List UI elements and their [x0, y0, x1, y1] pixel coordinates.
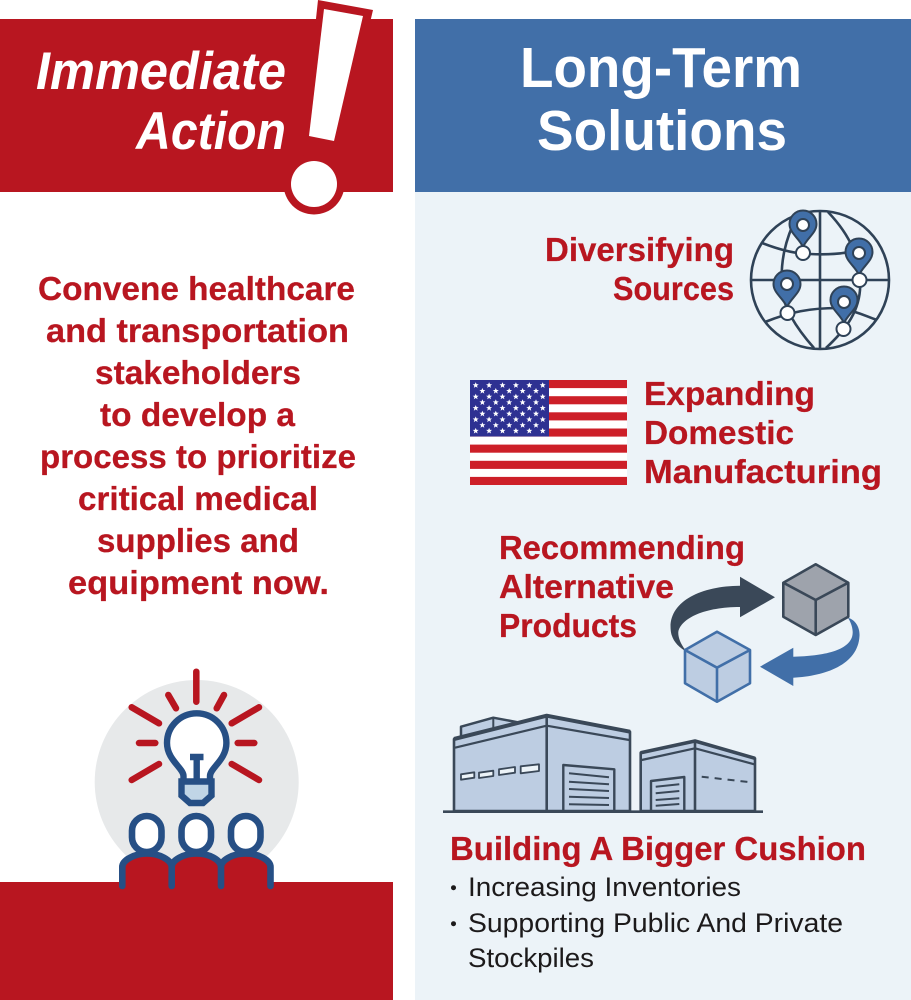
heading: immediate action: Action: [134, 102, 286, 161]
text: expanding domestic manufacturing: [644, 375, 882, 490]
rays: [132, 672, 259, 780]
location pins: [774, 210, 872, 323]
text: recommending alternative products: Products: [499, 607, 637, 644]
text: diversifying sources: [545, 231, 734, 307]
text: diversifying sources: Diversifying: [545, 231, 734, 268]
text: recommending alternative products: [499, 529, 745, 644]
icon: three people: [122, 816, 270, 886]
text block: convene stakeholders: equipment now.: [68, 564, 329, 601]
text: diversifying sources: Sources: [613, 270, 734, 307]
text: recommending alternative products: Recommending: [499, 529, 745, 566]
panel: long-term solutions: [415, 19, 911, 1000]
big warehouse: [461, 718, 518, 740]
heading: immediate action: Immediate: [36, 42, 286, 101]
heading: immediate action: [36, 42, 286, 161]
heading: long-term solutions: Solutions: [537, 99, 787, 163]
icon: warehouses: [443, 716, 763, 812]
icon: globe with location pins: [751, 210, 889, 349]
icon: american flag: [470, 380, 627, 485]
text block: convene stakeholders: supplies and: [97, 522, 299, 559]
text block: convene stakeholders: critical medical: [78, 480, 318, 517]
icon: swapping cubes with arrows: [671, 564, 860, 702]
text block: convene stakeholders: process to prioritize: [40, 438, 356, 475]
icon: exclamation mark: [284, 0, 373, 214]
text: expanding domestic manufacturing: Expanding: [644, 375, 815, 412]
header banner: long-term solutions: [415, 19, 911, 192]
small warehouse: [641, 741, 755, 811]
bullet list: Stockpiles: [468, 943, 594, 973]
heading: long-term solutions: [520, 36, 802, 163]
text block: convene stakeholders: and transportation: [46, 312, 349, 349]
text block: convene stakeholders: [38, 270, 356, 601]
icon: gray circle backdrop: [95, 680, 299, 884]
bulb: [167, 713, 226, 782]
panel background: [415, 192, 911, 1000]
panel: immediate action: [0, 0, 393, 1000]
text block: convene stakeholders: to develop a: [100, 396, 296, 433]
text block: convene stakeholders: stakeholders: [95, 354, 301, 391]
icon: light bulb with rays: [132, 672, 259, 803]
bullet list: Supporting Public And Private: [468, 908, 843, 938]
heading: building a bigger cushion: Building A Bigger Cushion: [450, 830, 866, 867]
heading: long-term solutions: Long-Term: [520, 36, 802, 100]
cube: blue: [685, 632, 750, 702]
bullet list: [451, 872, 843, 973]
header banner: immediate action: [0, 19, 393, 192]
bullet list: Increasing Inventories: [468, 872, 741, 902]
arrow: blue: [760, 618, 860, 686]
footer band: [0, 882, 393, 1000]
text: recommending alternative products: Alternative: [499, 568, 674, 605]
arrow: dark: [671, 577, 775, 652]
text: expanding domestic manufacturing: Domestic: [644, 414, 794, 451]
text block: convene stakeholders: Convene healthcare: [38, 270, 355, 307]
cube: gray: [783, 564, 848, 635]
text: expanding domestic manufacturing: Manufacturing: [644, 453, 882, 490]
